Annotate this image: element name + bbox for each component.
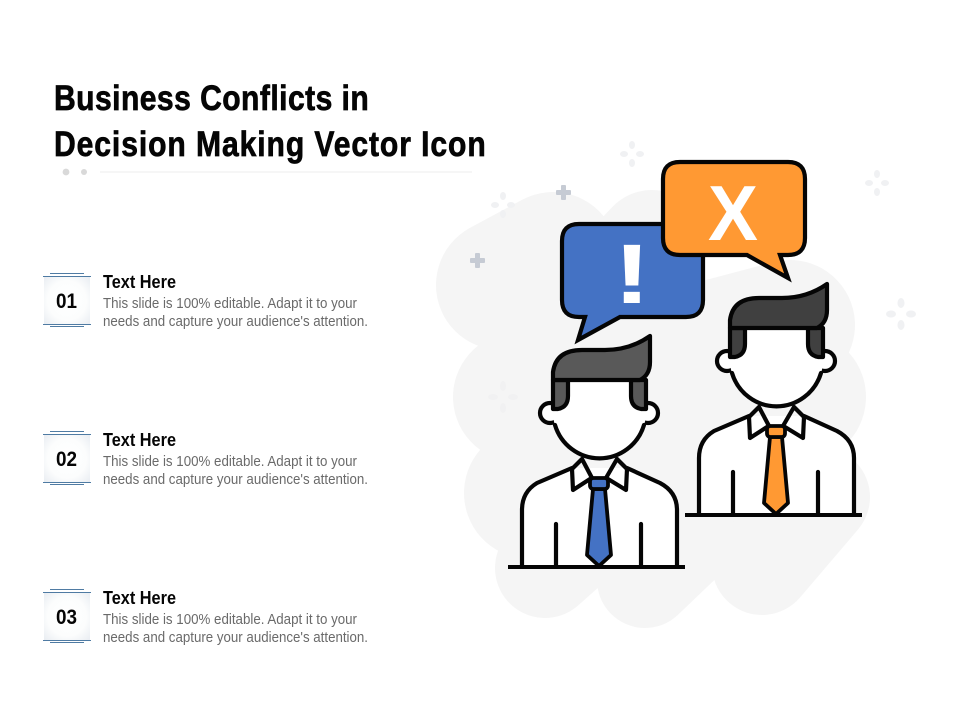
- ears: [540, 403, 658, 423]
- speech bubble: X: X: [708, 171, 758, 257]
- ears: [717, 351, 835, 371]
- person 1: [508, 336, 685, 569]
- item 02 text: [103, 430, 368, 488]
- number box 03: 03: [56, 606, 77, 629]
- item 01: [43, 272, 368, 330]
- number box 02: [43, 431, 91, 485]
- item 03 text: [103, 588, 368, 646]
- number box 02: 02: [56, 448, 77, 471]
- title divider: [63, 169, 472, 175]
- necktie: [587, 478, 611, 566]
- side hair: [730, 328, 823, 357]
- title: Decision Making Vector Icon: [54, 124, 486, 164]
- icon: plus signs: [470, 185, 571, 268]
- item 01 text: This slide is 100% editable. Adapt it to your: [103, 296, 357, 312]
- item 03 text: Text Here: [103, 588, 176, 608]
- title: [54, 78, 486, 164]
- necktie: [764, 426, 788, 514]
- person 2: [685, 284, 862, 517]
- speech bubble: X: [663, 162, 805, 278]
- item 01 text: [103, 272, 368, 330]
- desk line: [685, 513, 862, 517]
- speech bubble: exclamation: [562, 224, 703, 340]
- collar: [572, 459, 627, 490]
- speech bubble: exclamation: !: [613, 228, 651, 322]
- number box 01: 01: [56, 290, 77, 313]
- item 03 text: needs and capture your audience's attention.: [103, 630, 368, 646]
- number box 03: [43, 589, 91, 643]
- item 02: [43, 430, 368, 488]
- hair: [553, 336, 650, 380]
- item 02 text: This slide is 100% editable. Adapt it to your: [103, 454, 357, 470]
- arm lines: [733, 472, 818, 514]
- desk line: [508, 565, 685, 569]
- item 03 text: This slide is 100% editable. Adapt it to your: [103, 612, 357, 628]
- item 02 text: needs and capture your audience's attention.: [103, 472, 368, 488]
- collar: [749, 407, 804, 438]
- title: Business Conflicts in: [54, 78, 369, 118]
- item 01 text: Text Here: [103, 272, 176, 292]
- side hair: [553, 380, 646, 409]
- head: [553, 378, 646, 459]
- shirt: [522, 468, 677, 567]
- arm lines: [556, 524, 641, 566]
- item 02 text: Text Here: [103, 430, 176, 450]
- item 03: [43, 588, 368, 646]
- shirt: [699, 416, 854, 515]
- hair: [730, 284, 827, 328]
- number box 01: [43, 273, 91, 327]
- background blobs: [501, 245, 820, 580]
- item 01 text: needs and capture your audience's attention.: [103, 314, 368, 330]
- head: [730, 326, 823, 407]
- icon: sparkles: [488, 141, 916, 413]
